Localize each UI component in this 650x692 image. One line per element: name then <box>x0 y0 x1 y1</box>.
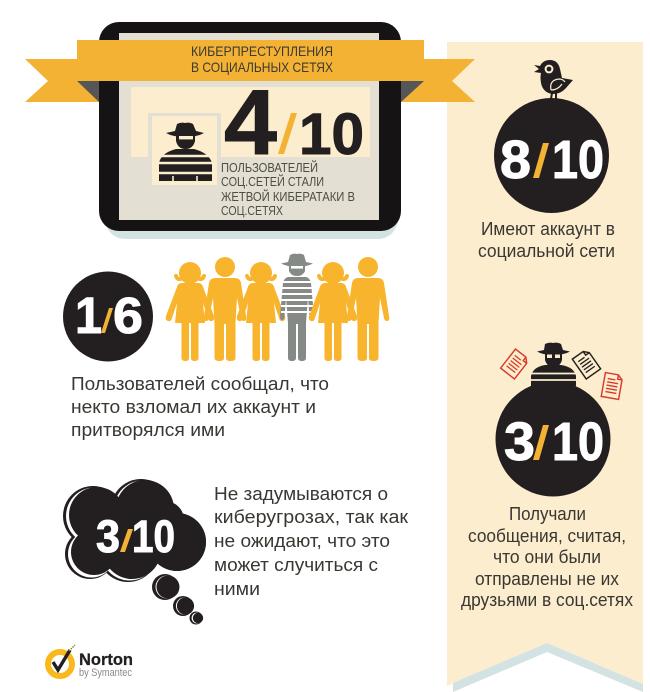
icon: red document right <box>601 373 623 399</box>
ribbon tails <box>25 59 475 102</box>
chart: 3/10 thought cloud <box>63 479 206 624</box>
chart: 1/6 circle: 1 <box>75 287 102 344</box>
chart: 8/10 circle: 8 <box>500 130 531 190</box>
woman 3 <box>237 262 285 361</box>
icon: robber in tablet <box>148 113 221 185</box>
thought bubbles <box>152 574 203 624</box>
text: not thinking about threats <box>214 484 408 599</box>
text: received messages: что они были <box>493 547 601 567</box>
ribbon band <box>77 40 424 81</box>
text: received messages <box>461 504 633 610</box>
panel: tablet with headline stat <box>25 22 475 239</box>
cloud highlight <box>66 480 171 580</box>
chart: 1/6 circle: 6 <box>113 287 143 344</box>
tablet body <box>99 22 401 239</box>
panel: right column banner <box>447 42 643 692</box>
cloud body <box>69 480 206 579</box>
stat: 4/10: 4 <box>224 72 277 174</box>
text: not thinking about threats: может случиться с <box>214 555 378 575</box>
text: has social account: Имеют аккаунт в <box>481 219 615 239</box>
ribbon folds <box>77 81 424 102</box>
text: account hacked <box>71 374 329 440</box>
text: received messages: сообщения, считая, <box>468 526 626 546</box>
text: victims: ПОЛЬЗОВАТЕЛЕЙ <box>221 160 318 175</box>
text: victims: СОЦ.СЕТЕЙ СТАЛИ <box>221 174 324 189</box>
text: account hacked: некто взломал их аккаунт и <box>71 397 316 417</box>
text: has social account: социальной сети <box>478 241 615 261</box>
chart: 3/10 circle: 3 <box>504 412 535 472</box>
stat: 4/10 <box>224 72 364 174</box>
woman 5 <box>309 262 357 361</box>
man 2 <box>204 257 246 361</box>
text: received messages: Получали <box>509 504 586 524</box>
text: account hacked: Пользователей сообщал, что <box>71 374 329 394</box>
icon: robber on circle <box>531 343 576 386</box>
text: victims: СОЦ.СЕТЯХ <box>221 204 284 218</box>
logo: Norton by Symantec <box>48 645 133 679</box>
logo: Norton by Symantec: Norton <box>79 650 133 669</box>
chart: 1/6 circle <box>63 272 153 362</box>
chart: 8/10 circle: 10 <box>552 130 604 190</box>
heading <box>191 43 334 75</box>
text: not thinking about threats: Не задумываются о <box>214 484 388 504</box>
text: victims: ЖЕТВОЙ КИБЕРАТАКИ В <box>221 189 355 204</box>
robber figure <box>280 254 314 361</box>
text: received messages: отправлены не их <box>475 569 619 589</box>
text: received messages: друзьями в соц.сетях <box>461 590 633 610</box>
chart: 8/10 circle <box>494 98 609 213</box>
pictogram: six people with one robber <box>166 254 389 361</box>
text: not thinking about threats: киберугрозах, так как <box>214 507 408 527</box>
heading: КИБЕРПРЕСТУПЛЕНИЯ <box>191 43 333 59</box>
chart: 3/10 thought cloud: 10 <box>132 511 175 562</box>
logo: Norton by Symantec: by Symantec <box>79 667 132 679</box>
text: not thinking about threats: ними <box>214 579 260 599</box>
text: account hacked: притворялся ими <box>71 420 225 440</box>
cloud outline <box>63 479 206 582</box>
icon: red document left <box>501 349 529 379</box>
icon: bird <box>534 60 573 99</box>
chart: 3/10 thought cloud: 3 <box>96 511 120 562</box>
chart: 3/10 circle <box>496 382 610 496</box>
icon: black document <box>572 349 601 379</box>
chart: 3/10 circle: 10 <box>552 412 604 472</box>
text: victims <box>221 160 355 218</box>
heading: В СОЦИАЛЬНЫХ СЕТЯХ <box>191 59 334 75</box>
stat background <box>131 87 370 157</box>
man 6 <box>347 257 389 361</box>
text: has social account <box>478 219 615 261</box>
woman 1 <box>166 262 214 361</box>
stat: 4/10: 10 <box>299 102 364 167</box>
text: not thinking about threats: не ожидают, что это <box>214 531 390 551</box>
